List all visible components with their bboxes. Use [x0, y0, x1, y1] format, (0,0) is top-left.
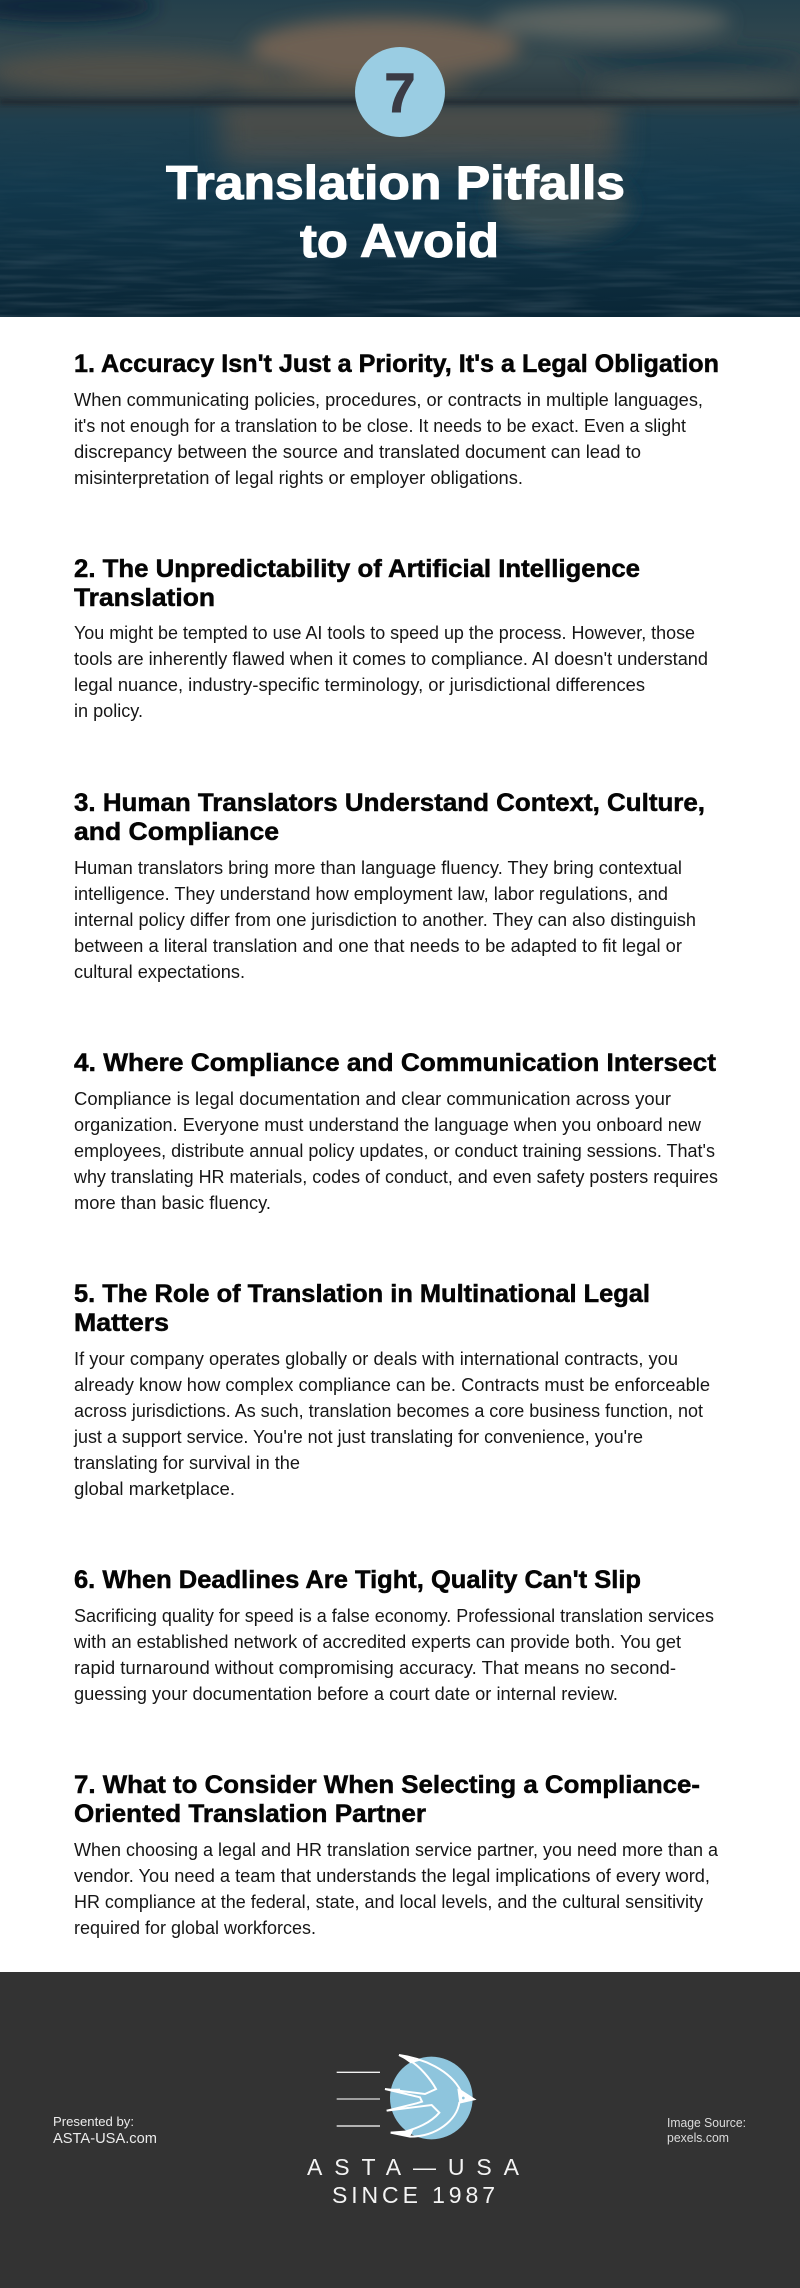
- section 3: [74, 789, 705, 982]
- body 6: Sacrificing quality for speed is a false economy. Professional translation services: [74, 1606, 714, 1626]
- heading 2: 2. The Unpredictability of Artificial Intelligence: [74, 555, 640, 583]
- body 4: why translating HR materials, codes of conduct, and even safety posters requires: [73, 1167, 718, 1187]
- body 5: [73, 1349, 710, 1499]
- body 5: across jurisdictions. As such, translation becomes a core business function, not: [74, 1401, 703, 1421]
- logo wordmark: SINCE 1987: [332, 2182, 495, 2208]
- heading 7: 7. What to Consider When Selecting a Compliance-: [74, 1771, 700, 1799]
- body 1: misinterpretation of legal rights or employer obligations.: [74, 468, 523, 488]
- body 2: [74, 623, 708, 721]
- footer credit: image source: [667, 2115, 746, 2145]
- heading 5: Matters: [74, 1309, 169, 1337]
- body 1: When communicating policies, procedures, or contracts in multiple languages,: [74, 390, 703, 410]
- heading 2: Translation: [74, 584, 215, 612]
- heading 7: [74, 1771, 700, 1828]
- body 3: intelligence. They understand how employment law, labor regulations, and: [74, 884, 668, 904]
- body 6: guessing your documentation before a court date or internal review.: [74, 1684, 618, 1704]
- heading 5: [74, 1280, 650, 1337]
- body 2: legal nuance, industry-specific terminology, or jurisdictional differences: [74, 675, 645, 695]
- heading 1: 1. Accuracy Isn't Just a Priority, It's a Legal Obligation: [74, 350, 719, 378]
- heading 3: and Compliance: [74, 818, 279, 846]
- body 1: discrepancy between the source and translated document can lead to: [74, 442, 641, 462]
- body 4: Compliance is legal documentation and clear communication across your: [74, 1089, 671, 1109]
- body 3: internal policy differ from one jurisdiction to another. They can also distinguish: [74, 910, 696, 930]
- body 7: required for global workforces.: [74, 1918, 316, 1938]
- footer panel: [0, 1972, 800, 2288]
- footer credit: image source: pexels.com: [667, 2130, 729, 2145]
- body 3: cultural expectations.: [74, 962, 245, 982]
- body 4: employees, distribute annual policy updates, or conduct training sessions. That's: [74, 1141, 715, 1161]
- body 7: When choosing a legal and HR translation service partner, you need more than a: [74, 1840, 719, 1860]
- body 1: it's not enough for a translation to be close. It needs to be exact. Even a slight: [74, 416, 686, 436]
- body 4: more than basic fluency.: [74, 1193, 271, 1213]
- section 1: [74, 350, 719, 488]
- body 7: vendor. You need a team that understands the legal implications of every word,: [74, 1866, 710, 1886]
- body 6: with an established network of accredited experts can provide both. You get: [73, 1632, 681, 1652]
- body 4: [73, 1089, 718, 1213]
- footer credit: image source: Image Source:: [667, 2115, 746, 2130]
- logo: ASTA-USA bird: [337, 2055, 474, 2139]
- title: to Avoid: [300, 214, 499, 267]
- body 2: You might be tempted to use AI tools to speed up the process. However, those: [74, 623, 695, 643]
- body 5: already know how complex compliance can be. Contracts must be enforceable: [74, 1375, 710, 1395]
- body 1: [74, 390, 703, 488]
- section 7: [74, 1771, 719, 1938]
- section 6: [73, 1566, 714, 1704]
- body 2: in policy.: [74, 701, 143, 721]
- body 5: global marketplace.: [74, 1479, 235, 1499]
- body 7: [74, 1840, 719, 1938]
- body 6: rapid turnaround without compromising accuracy. That means no second-: [74, 1658, 676, 1678]
- logo wordmark: ASTA—USA: [307, 2154, 520, 2180]
- body 3: between a literal translation and one that needs to be adapted to fit legal or: [74, 936, 682, 956]
- body 4: organization. Everyone must understand the language when you onboard new: [74, 1115, 702, 1135]
- section 2: [74, 555, 708, 721]
- section 4: [73, 1049, 718, 1213]
- section 5: [73, 1280, 710, 1499]
- body 5: If your company operates globally or deals with international contracts, you: [74, 1349, 678, 1369]
- title: Translation Pitfalls: [166, 156, 625, 209]
- heading 6: 6. When Deadlines Are Tight, Quality Can't Slip: [74, 1566, 641, 1594]
- body 5: translating for survival in the: [74, 1453, 300, 1473]
- footer credit: presented by: [53, 2114, 157, 2147]
- footer credit: presented by: Presented by:: [53, 2114, 134, 2129]
- heading 3: 3. Human Translators Understand Context, Culture,: [74, 789, 705, 817]
- heading 7: Oriented Translation Partner: [74, 1800, 426, 1828]
- heading 4: 4. Where Compliance and Communication Intersect: [74, 1049, 717, 1077]
- hero banner: sunset sea photo: [0, 0, 800, 317]
- heading 2: [74, 555, 640, 612]
- body 5: just a support service. You're not just translating for convenience, you're: [73, 1427, 643, 1447]
- footer credit: presented by: ASTA-USA.com: [53, 2130, 157, 2147]
- body 2: tools are inherently flawed when it comes to compliance. AI doesn't understand: [74, 649, 708, 669]
- body 6: [73, 1606, 714, 1704]
- heading 5: 5. The Role of Translation in Multinational Legal: [74, 1280, 650, 1308]
- title: [166, 156, 625, 267]
- number badge: 7: [384, 61, 416, 124]
- number badge: [355, 47, 445, 137]
- body 3: Human translators bring more than language fluency. They bring contextual: [74, 858, 682, 878]
- heading 3: [74, 789, 705, 846]
- logo wordmark: [307, 2154, 520, 2208]
- body 7: HR compliance at the federal, state, and local levels, and the cultural sensitivity: [74, 1892, 703, 1912]
- body 3: [74, 858, 696, 982]
